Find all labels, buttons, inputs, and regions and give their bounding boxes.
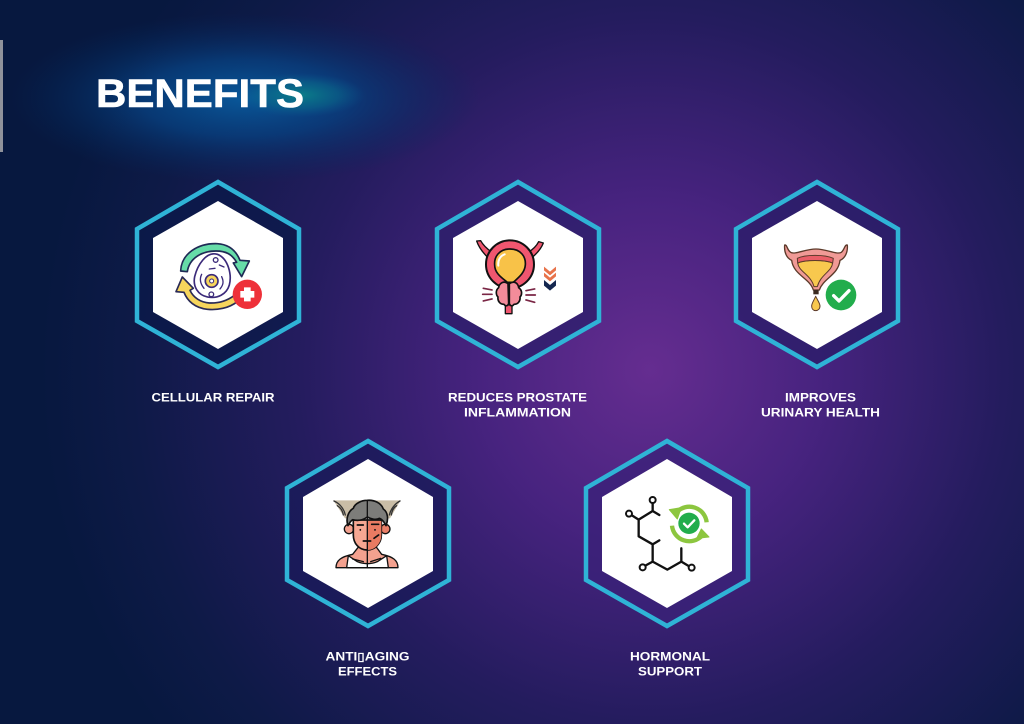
- label: INFLAMMATION: [464, 406, 571, 420]
- title glow: [0, 0, 490, 200]
- white hexagon: [453, 201, 583, 349]
- white hexagon: [752, 201, 882, 349]
- label: EFFECTS: [338, 666, 397, 678]
- hexagon frame: [586, 441, 748, 626]
- panel: hormonal support: [586, 441, 748, 678]
- hexagon frame: [287, 441, 449, 626]
- label: [448, 392, 587, 420]
- icon: molecule with renewal check: [626, 497, 709, 571]
- white hexagon: [602, 459, 732, 608]
- label: [761, 392, 880, 420]
- panel: cellular repair: [137, 182, 299, 404]
- panel: reduces prostate inflammation: [437, 182, 599, 420]
- label: [630, 650, 710, 678]
- label: ANTI▯AGING: [326, 650, 410, 664]
- hexagon frame: [137, 182, 299, 367]
- white hexagon: [303, 459, 433, 608]
- left edge bar: [0, 40, 3, 152]
- icon: cell with repair arrows: [176, 244, 262, 310]
- label: CELLULAR REPAIR: [152, 392, 275, 404]
- hexagon frame: [736, 182, 898, 367]
- title: BENEFITS: [96, 72, 304, 116]
- label: URINARY HEALTH: [761, 406, 880, 420]
- panel: anti-aging effects: [287, 441, 449, 678]
- icon: prostate: [477, 240, 556, 314]
- white hexagon: [153, 201, 283, 349]
- panel: improves urinary health: [736, 182, 898, 420]
- icon: bladder with check: [785, 245, 856, 311]
- icon: aging face: [333, 500, 401, 568]
- label: HORMONAL: [630, 650, 710, 664]
- label: REDUCES PROSTATE: [448, 392, 587, 404]
- label: IMPROVES: [785, 392, 856, 404]
- label: [326, 650, 410, 678]
- label: SUPPORT: [638, 666, 703, 678]
- hexagon frame: [437, 182, 599, 367]
